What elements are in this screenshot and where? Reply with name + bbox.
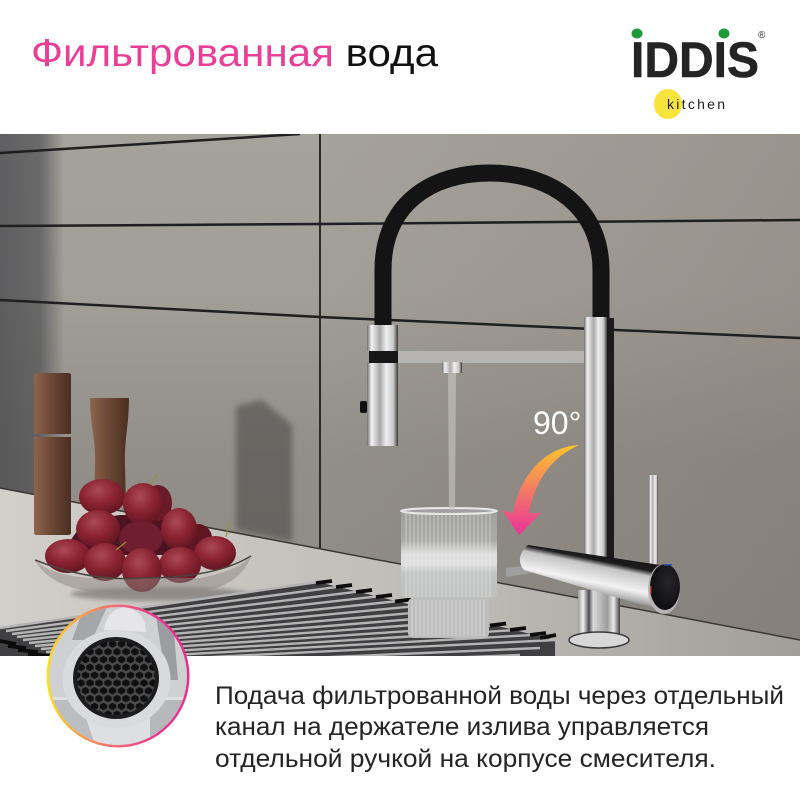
description text: отдельной ручкой на корпусе смесителя. [215,745,716,773]
plum stems [116,474,229,550]
column shadow [607,318,614,558]
wall tile joints [0,134,800,555]
control disc [648,564,680,614]
counter edge line [0,488,800,640]
spray head [360,325,398,446]
small outlet stub [506,565,532,577]
aerator outlet [442,362,462,373]
wall [0,134,800,656]
description text [215,682,784,773]
spout arm [395,351,587,363]
outer collar [62,630,170,728]
vertical column [584,317,607,560]
faucet [360,173,680,648]
logo: IDDIS kitchen: IDDIS [631,32,759,88]
faucet body [520,545,660,609]
black hose [383,173,601,326]
logo: IDDIS kitchen [631,28,766,119]
glass bowl [35,556,251,594]
kitchen photo scene [0,134,800,672]
glass of water [401,508,497,638]
wall shading [0,342,800,639]
description text: канал на держателе излива управляется [215,713,709,741]
drying rack [0,579,556,656]
lever handle [649,475,658,568]
base plate [569,632,629,648]
chrome reflections [72,608,106,640]
description text: Подача фильтрованной воды через отдельный [215,682,784,710]
rotation label: 90° [533,405,581,441]
arrow: 90 degree rotation [502,445,579,535]
base stem [578,590,620,634]
aerator close-up circle [45,604,190,750]
title: Фильтрованная вода [31,32,438,75]
countertop [0,488,800,656]
bowl shadow [70,587,250,601]
water stream [448,373,456,510]
wooden mill, short [90,398,129,505]
shadow of faucet on wall [236,400,292,542]
dark plum mass [71,515,194,555]
wooden mill, tall [34,373,71,535]
logo: IDDIS kitchen: ® [758,30,766,41]
bowl of plums [35,474,251,601]
logo: IDDIS kitchen: kitchen [667,96,725,112]
